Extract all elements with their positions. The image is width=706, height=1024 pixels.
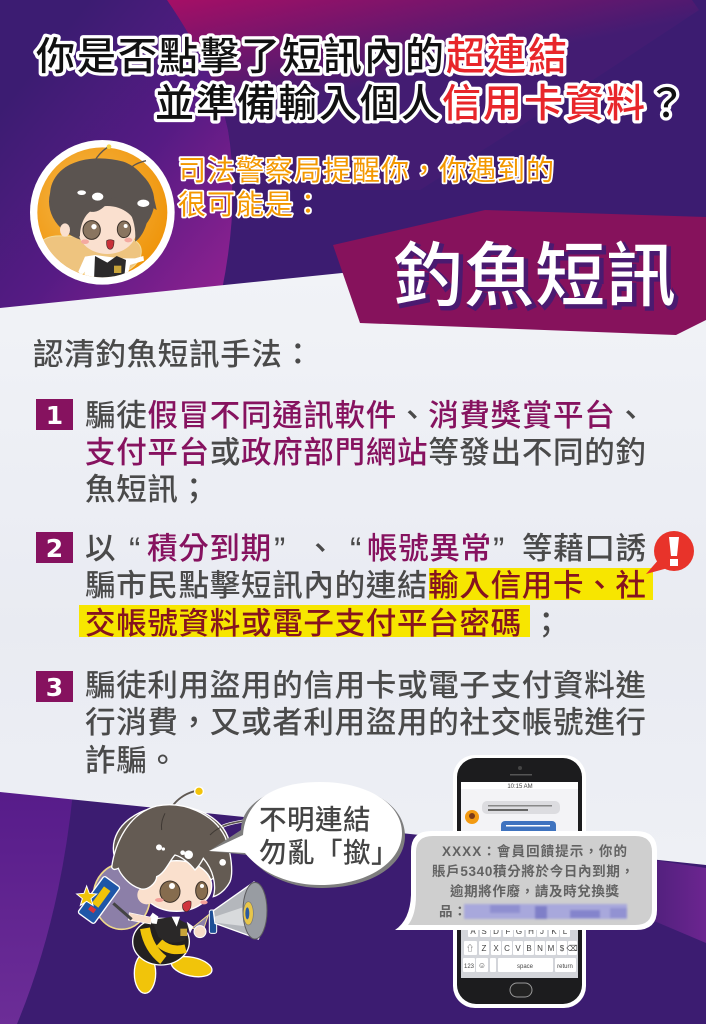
heading: recognise the scam: 認清釣魚短訊手法： xyxy=(33,338,314,372)
item 2 text: “ xyxy=(350,531,362,569)
keyboard keys: N xyxy=(537,944,543,953)
item 2 text: 、 xyxy=(305,532,336,566)
banner: phishing SMS: 釣魚短訊 xyxy=(396,223,680,324)
keyboard keys: L xyxy=(563,927,568,936)
item 2 xyxy=(36,531,694,641)
keyboard keys: ☺ xyxy=(478,961,486,970)
keyboard keys: $ xyxy=(560,944,565,953)
icon: smartphone xyxy=(453,755,586,1008)
icon: avatar portrait xyxy=(30,140,175,285)
number badge 3 xyxy=(36,671,73,702)
keyboard keys: C xyxy=(504,944,510,953)
keyboard keys: 123 xyxy=(464,964,475,970)
keyboard keys: F xyxy=(506,927,511,936)
screen content: 10:15 AM xyxy=(507,784,533,790)
keyboard keys: V xyxy=(515,944,521,953)
keyboard keys: Z xyxy=(482,944,487,953)
item 2 text: 積分到期 xyxy=(147,532,272,566)
keyboard keys: J xyxy=(540,927,544,936)
keyboard keys: H xyxy=(528,927,534,936)
item 3 text xyxy=(85,669,647,778)
item 2 text: 以 xyxy=(85,532,116,566)
keyboard keys: space xyxy=(517,964,534,970)
number badge 1 xyxy=(36,399,73,430)
highlight bars xyxy=(79,568,653,637)
item 2 text: 騙市民點擊短訊內的連結輸入信用卡、社 xyxy=(85,569,647,603)
item 2 text: 等藉口誘 xyxy=(522,532,647,566)
item 2 text: ” xyxy=(274,531,286,569)
item 2 text xyxy=(85,531,647,641)
keyboard keys: A xyxy=(470,927,476,936)
speech bubble: warning: 勿亂「撳」 xyxy=(259,837,399,868)
keyboard keys: D xyxy=(493,927,499,936)
item 1 xyxy=(36,399,647,507)
item 2 text: “ xyxy=(129,531,141,569)
item 2 text: 交帳號資料或電子支付平台密碼 ； xyxy=(85,607,562,641)
item 3 text: 行消費，又或者利用盜用的社交帳號進行 xyxy=(85,706,647,740)
title: 並準備輸入個人信用卡資料？ xyxy=(155,83,688,126)
item 2 text: ” xyxy=(493,531,505,569)
number badge 2: 2 xyxy=(46,534,63,563)
panel: light content area xyxy=(0,273,706,865)
speech bubble: warning xyxy=(209,782,405,888)
callout: sms message: 賬戶5340積分將於今日內到期， xyxy=(432,863,634,879)
keyboard keys xyxy=(463,926,578,972)
title xyxy=(36,36,688,126)
keyboard keys: S xyxy=(481,927,487,936)
item 2 text: 帳號異常 xyxy=(367,532,492,566)
callout: sms message: 品： xyxy=(439,904,467,919)
screen content xyxy=(461,782,578,978)
icon: bee mascot with megaphone xyxy=(77,786,267,993)
keyboard keys: return xyxy=(557,964,573,970)
keyboard keys: G xyxy=(516,927,522,936)
number badge 3: 3 xyxy=(46,673,63,702)
callout: sms message xyxy=(395,831,657,930)
item 3 text: 騙徒利用盜用的信用卡或電子支付資料進 xyxy=(85,669,647,703)
item 1 text xyxy=(85,399,647,507)
item 1 text: 騙徒假冒不同通訊軟件、消費獎賞平台、 xyxy=(85,399,647,433)
item 1 text: 魚短訊； xyxy=(85,473,210,507)
subtitle: reminder: 很可能是： xyxy=(178,189,323,220)
speech bubble: warning: 不明連結 xyxy=(259,804,371,835)
blurred link xyxy=(464,904,627,919)
keyboard keys: K xyxy=(551,927,557,936)
icon: exclamation alert xyxy=(646,531,694,574)
subtitle: reminder: 司法警察局提醒你，你遇到的 xyxy=(178,155,555,186)
number badge 2 xyxy=(36,532,73,563)
item 1 text: 支付平台或政府部門網站等發出不同的釣 xyxy=(85,436,647,470)
item 3 text: 詐騙。 xyxy=(85,744,179,778)
subtitle: reminder xyxy=(178,155,555,220)
banner: phishing SMS: 釣魚短訊 xyxy=(393,220,677,321)
keyboard keys: ⌫ xyxy=(566,944,578,953)
keyboard keys: B xyxy=(526,944,532,953)
item 3 xyxy=(36,669,647,778)
number badge 1: 1 xyxy=(46,401,63,430)
keyboard keys: ⇧ xyxy=(466,943,474,953)
keyboard keys: X xyxy=(493,944,499,953)
keyboard keys: M xyxy=(548,944,555,953)
callout: sms message: 逾期將作廢，請及時兌換獎 xyxy=(450,883,620,899)
title: 你是否點擊了短訊內的超連結 xyxy=(36,36,569,79)
banner: phishing SMS xyxy=(333,210,706,335)
callout: sms message: XXXX：會員回饋提示，你的 xyxy=(442,843,627,859)
